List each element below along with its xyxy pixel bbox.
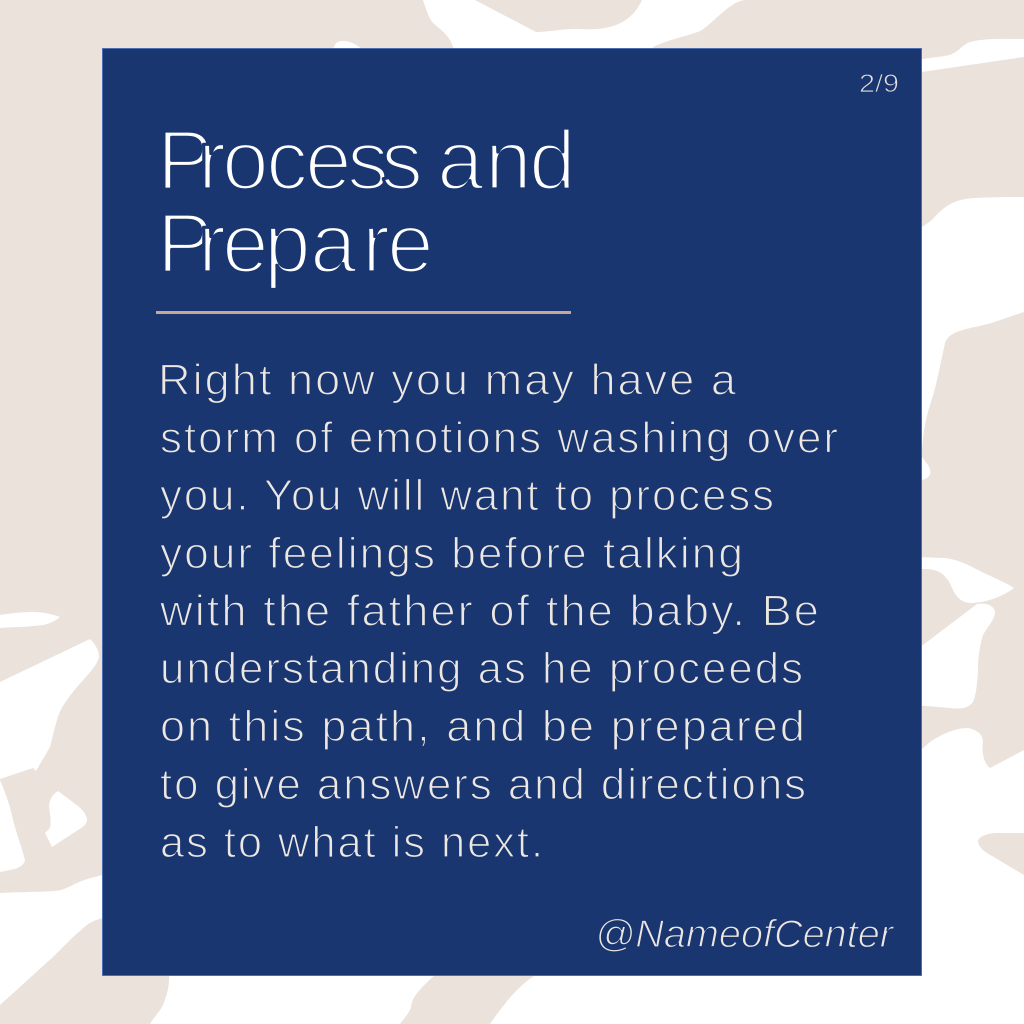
body text: your feelings before talking xyxy=(160,529,745,578)
title: e xyxy=(387,196,434,290)
title xyxy=(157,113,576,290)
body text: with the father of the baby. Be xyxy=(159,586,821,636)
body text: as to what is next. xyxy=(160,818,545,867)
handle: @NameofCenter xyxy=(595,913,895,956)
divider line under title xyxy=(156,311,571,314)
title: r xyxy=(198,196,226,290)
body text xyxy=(158,356,840,867)
title: P xyxy=(157,196,213,290)
title: r xyxy=(198,113,226,207)
title: ss xyxy=(347,113,423,207)
body text: storm of emotions washing over xyxy=(160,414,840,462)
title: P xyxy=(157,113,213,207)
title: r xyxy=(362,196,390,290)
page number: 2/9 xyxy=(859,70,899,98)
body text: Right now you may have a xyxy=(158,356,738,404)
body text: you. You will want to process xyxy=(160,471,776,520)
title: epa xyxy=(222,196,357,290)
title: oce xyxy=(222,113,352,207)
body text: on this path, and be prepared xyxy=(160,702,807,751)
panel: main navy card xyxy=(102,48,922,976)
body text: understanding as he proceeds xyxy=(160,644,805,693)
title: and xyxy=(412,113,576,207)
body text: to give answers and directions xyxy=(160,760,808,809)
